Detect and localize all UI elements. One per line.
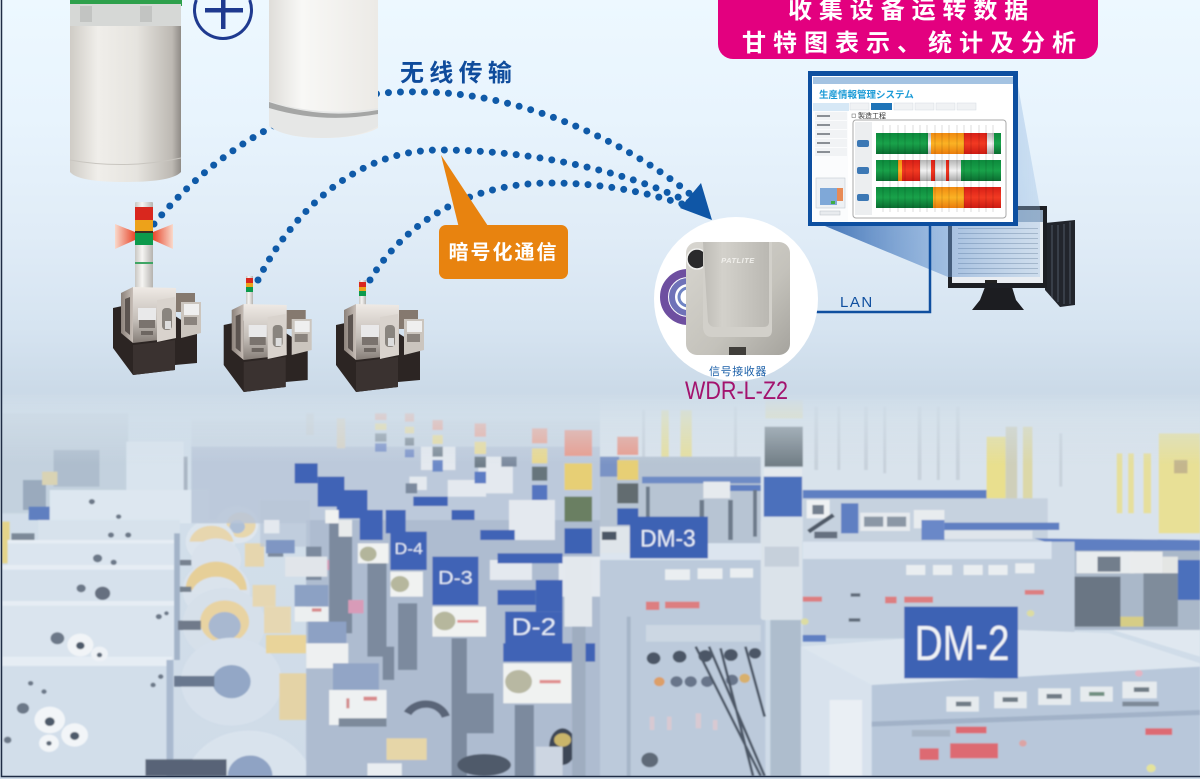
sidebar menu	[813, 111, 848, 222]
wireless signal dots	[154, 92, 705, 280]
DM-3 sign: DM-3	[640, 526, 696, 552]
white circle backdrop	[654, 217, 818, 381]
pink accents	[321, 560, 364, 613]
distant tower lights	[306, 413, 592, 777]
gantt row 2	[876, 160, 1001, 181]
plus sign	[194, 0, 251, 38]
factory photo background	[0, 395, 1200, 777]
large tower pole	[135, 202, 153, 288]
receiver body	[686, 242, 790, 355]
receiver mid panel	[703, 242, 772, 337]
blue panels	[295, 463, 595, 662]
machine body 1	[113, 287, 201, 375]
foreground signal towers	[617, 400, 803, 776]
back machine	[801, 542, 1075, 642]
tabs	[813, 103, 976, 111]
sign captions: D-3	[438, 568, 473, 589]
machine row icons	[857, 140, 869, 201]
spool discs	[145, 507, 312, 776]
lit flare right	[153, 224, 173, 249]
screen heading: 製造工程	[858, 111, 886, 120]
wireless receiver	[654, 217, 818, 381]
lower dark machinery	[367, 704, 576, 776]
arrow head	[680, 183, 712, 220]
projection beam from monitor	[825, 86, 1040, 277]
LAN label: LAN	[840, 294, 874, 311]
right half of the factory	[600, 400, 1200, 777]
back crowd right	[600, 457, 1059, 543]
back right panels	[1034, 538, 1200, 630]
tower case	[1045, 220, 1075, 307]
pink banner	[718, 0, 1098, 59]
fog overlay	[2, 400, 1200, 459]
desktop computer	[948, 206, 1075, 310]
white wireless unit right	[269, 0, 378, 138]
gantt row 1	[876, 133, 1001, 154]
pink banner: 甘特图表示、统计及分析	[742, 30, 1083, 57]
monitor stand	[972, 287, 1024, 310]
left front machine	[600, 527, 765, 777]
receiver cover	[703, 242, 769, 327]
connector slot	[729, 347, 746, 355]
distant crowd left	[2, 438, 127, 564]
brand text: PATLITE	[721, 256, 755, 265]
machine 3 with small tower	[336, 280, 424, 392]
misty back wall stripes	[600, 400, 1200, 540]
monitor	[948, 206, 1047, 288]
DM-2 sign: DM-2	[915, 616, 1009, 671]
callout: encrypted communication: 暗号化通信	[448, 241, 558, 264]
sign captions: D-4	[395, 541, 423, 558]
tower segments	[135, 207, 153, 264]
dotted arc: machine 3	[370, 183, 705, 280]
DM-3 sign	[630, 517, 708, 558]
sign captions	[395, 541, 556, 641]
machine 2 with small tower	[224, 276, 312, 392]
dotted arc: top unit	[154, 92, 697, 224]
callout: encrypted communication	[439, 155, 568, 279]
large signal light unit left	[70, 0, 182, 182]
stepped machine bodies	[2, 442, 209, 777]
lamp dial	[687, 249, 707, 269]
right front machine	[801, 630, 1200, 776]
gray-blue plates with white lower plates	[266, 540, 387, 727]
signal rings	[664, 273, 712, 321]
browser bar	[813, 77, 1013, 84]
monitoring screen enlarged	[808, 71, 1018, 226]
receiver caption: 信号接收器	[709, 364, 767, 378]
mini calendar	[816, 178, 845, 208]
dotted arc: machine 2	[258, 150, 700, 280]
sign captions: D-2	[512, 615, 556, 641]
app title: 生産情報管理システム	[819, 89, 914, 101]
heading: wireless transmission: 无线传输	[400, 60, 517, 87]
gantt chart	[853, 120, 1006, 218]
lit flare left	[115, 224, 135, 249]
LAN connection line	[785, 226, 930, 312]
orange material stacks	[244, 542, 307, 721]
left half of the factory	[2, 413, 600, 777]
portrait plates	[325, 510, 571, 703]
DM-2 sign	[904, 607, 1018, 678]
dense middle crowd	[191, 420, 600, 777]
model name: WDR-L-Z2	[685, 377, 788, 405]
machine with large tower light	[113, 202, 201, 375]
gantt row 3	[876, 187, 1001, 208]
